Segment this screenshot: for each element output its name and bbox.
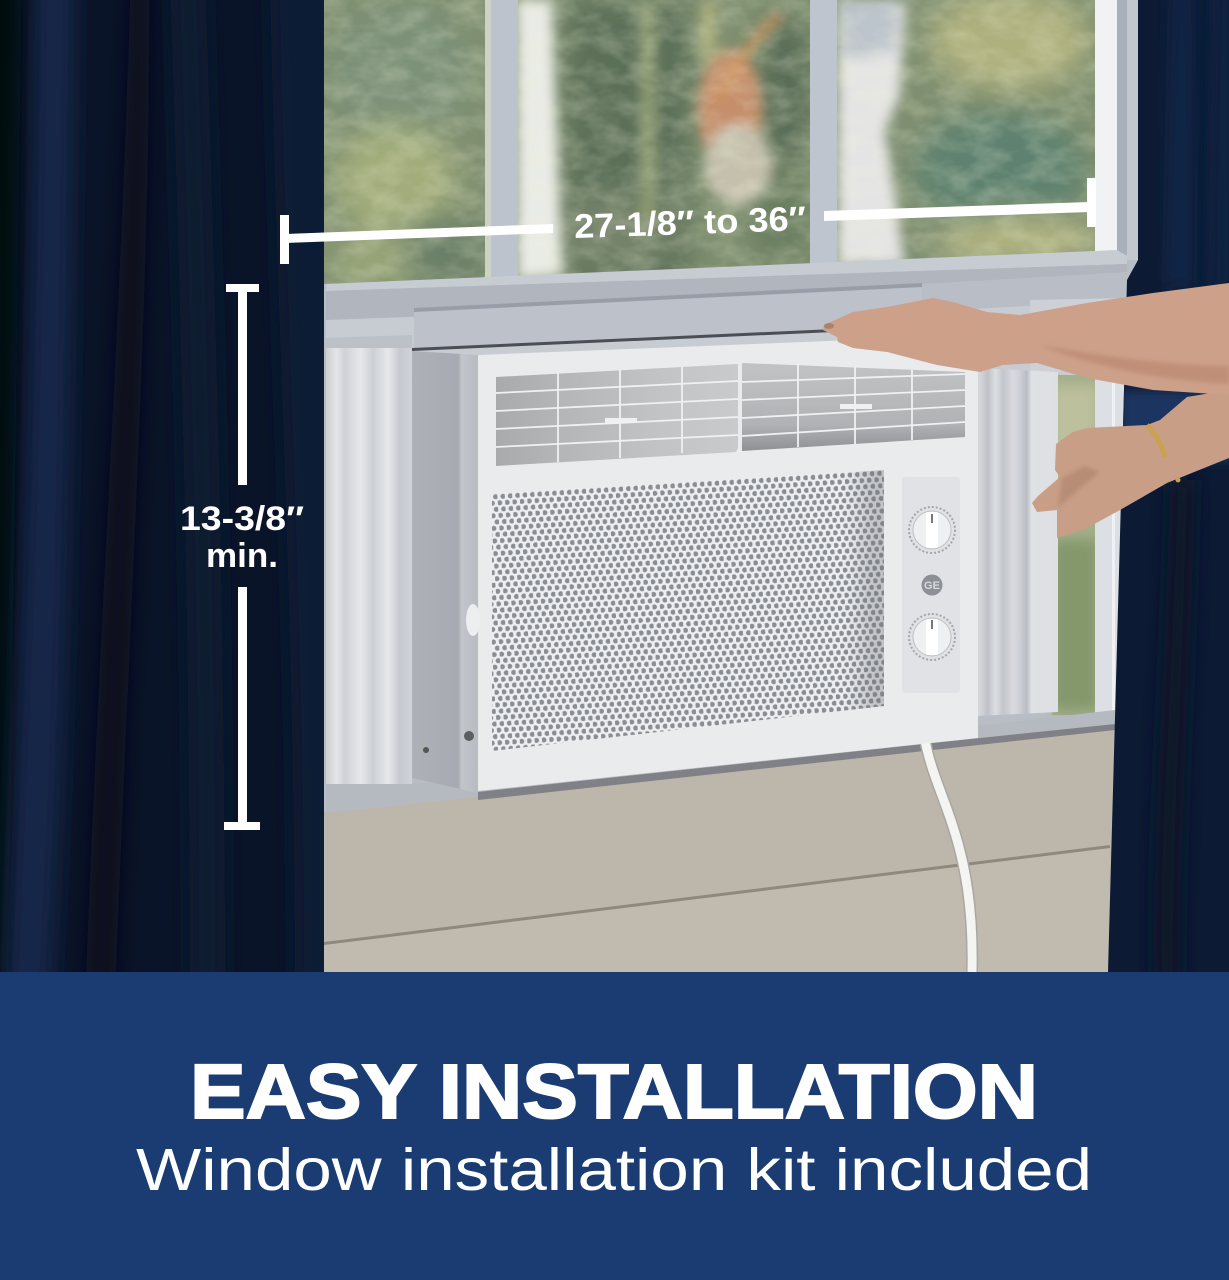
height label xyxy=(180,500,304,575)
window muntins and frame xyxy=(326,0,1139,390)
outdoor view through upper window xyxy=(324,0,1104,290)
height label: min. xyxy=(206,537,278,575)
GE logo xyxy=(922,574,942,596)
AC side housing xyxy=(412,351,478,793)
lower hand and arm xyxy=(1032,390,1229,538)
air conditioner unit xyxy=(412,335,978,793)
right air vent xyxy=(742,363,965,451)
control panel xyxy=(902,477,960,693)
dimension: width xyxy=(280,178,1096,264)
top window filler strip xyxy=(412,283,922,351)
bottom banner xyxy=(0,972,1229,1280)
width label: 27-1/8″ to 36″ xyxy=(573,200,807,246)
temperature knob xyxy=(909,507,955,553)
AC front cover xyxy=(478,335,978,791)
right window frame, lower xyxy=(922,272,1127,716)
heading: EASY INSTALLATION xyxy=(190,1049,1038,1135)
GE logo: GE xyxy=(924,580,940,592)
wall below window xyxy=(324,730,1115,972)
dimension: height xyxy=(180,284,304,830)
window sill xyxy=(326,710,1115,813)
upper hand and arm xyxy=(823,283,1229,395)
right accordion side panel xyxy=(978,368,1058,716)
background wall and window frame xyxy=(324,0,1139,972)
fan mode knob xyxy=(909,614,955,660)
side screws and tab xyxy=(423,604,480,753)
width dimension line and end caps xyxy=(280,178,1096,264)
height label: 13-3/8″ xyxy=(180,500,304,538)
outdoor view through lower right gap xyxy=(1052,375,1098,715)
left curtain xyxy=(0,0,340,1000)
subheading: Window installation kit included xyxy=(136,1137,1092,1203)
power cord xyxy=(925,740,972,972)
left air vent xyxy=(496,364,738,466)
left accordion side panel xyxy=(326,348,412,784)
honeycomb front grille xyxy=(492,470,884,751)
height dimension line and end caps xyxy=(224,284,260,830)
right curtain xyxy=(1100,0,1229,1000)
